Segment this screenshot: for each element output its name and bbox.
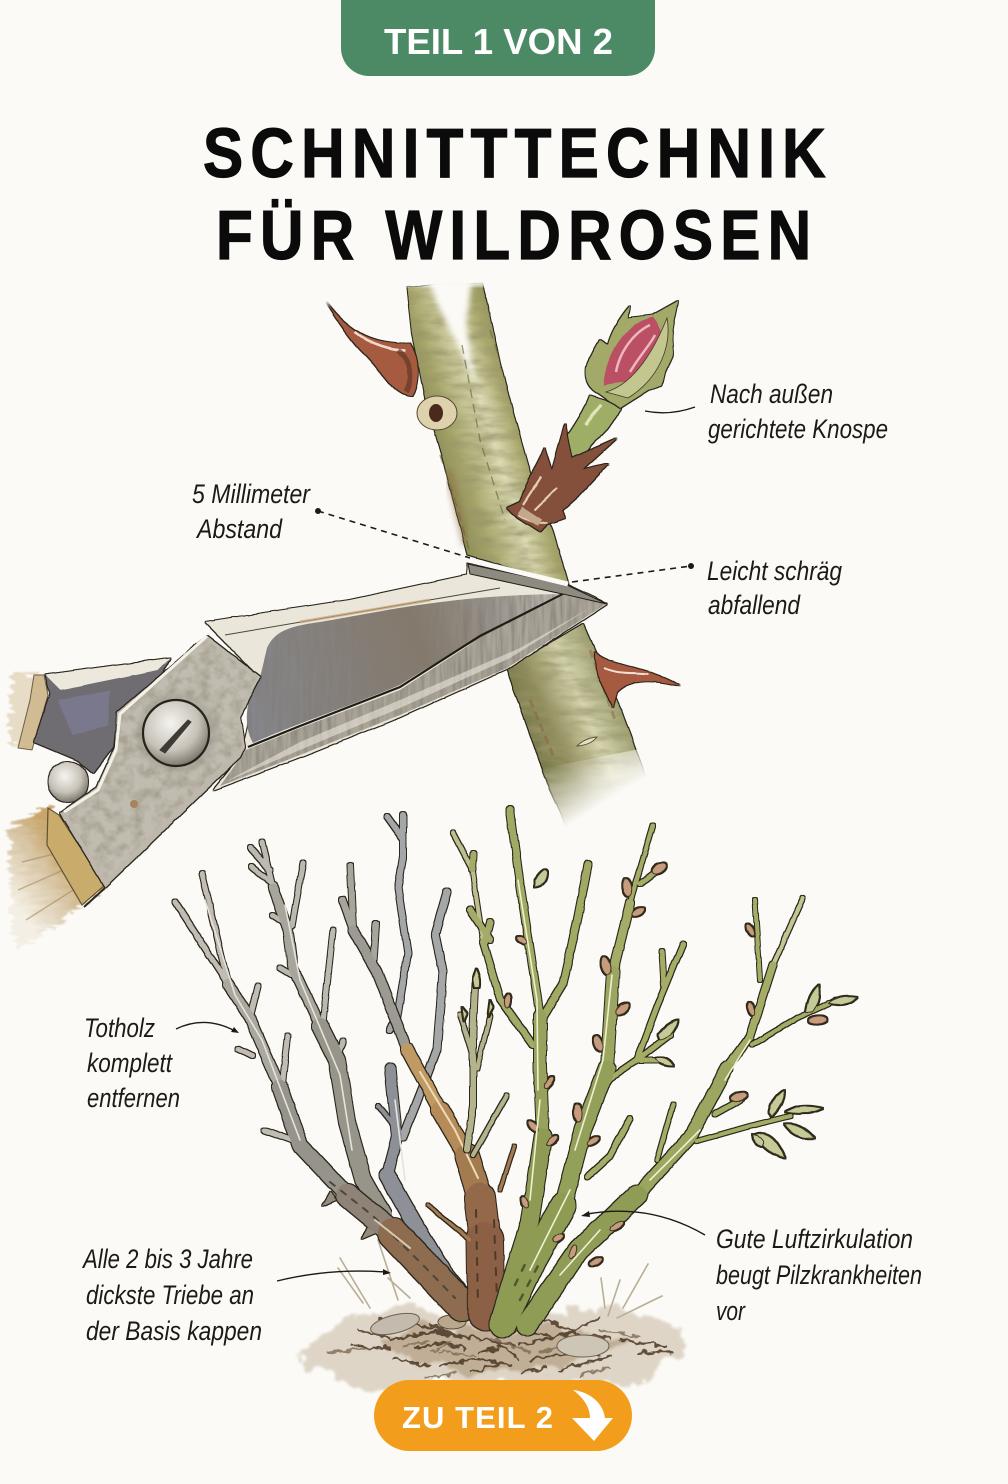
bluish dead branch [378, 815, 468, 1302]
annotation: Leicht schräg abfallend: abfallend [708, 590, 801, 620]
title [203, 114, 826, 274]
upper handle fibres [10, 672, 48, 750]
annotation: 5 Millimeter Abstand: 5 Millimeter [192, 479, 311, 509]
illustration: green healthy branches [453, 810, 857, 1325]
annotation: Nach außen gerichtete Knospe: gerichtete Knospe [708, 414, 888, 444]
branch G [453, 833, 483, 942]
branch gray left with brown base [175, 873, 462, 1306]
branch I [773, 898, 803, 965]
annotation: Gute Luftzirkulation: beugt Pilzkrankheiten [716, 1260, 922, 1290]
annotation: Leicht schräg abfallend: Leicht schräg [707, 556, 842, 586]
blade [205, 560, 607, 790]
annotation: Gute Luftzirkulation: vor [716, 1296, 746, 1326]
bud scale cluster [507, 424, 617, 532]
illustration: dead wood branches [175, 815, 514, 1312]
illustration: rose stem with bud and thorns [8, 272, 685, 950]
annotation: 5 Millimeter Abstand [192, 479, 470, 558]
highlights dead wood [205, 900, 455, 1298]
thorn: upper left [326, 302, 418, 396]
rose bud [586, 301, 678, 408]
branch with tan trunk [342, 866, 514, 1312]
annotation: 5 Millimeter Abstand: Abstand [195, 514, 283, 544]
annotation: Alle 2 bis 3 Jahre [81, 1244, 391, 1346]
leaf scar eye [417, 396, 457, 430]
illustration: pale young branches [460, 984, 507, 1155]
annotation: Totholz komplett entfernen: entfernen [87, 1083, 180, 1113]
annotation: Nach außen gerichtete Knospe: Nach außen [710, 379, 833, 409]
branch H [630, 825, 653, 903]
leaves [462, 870, 857, 1158]
annotation: Totholz komplett entfernen: komplett [87, 1048, 173, 1078]
upper stem [398, 272, 568, 584]
button: Zu Teil 2 [374, 1380, 632, 1451]
title: FÜR WILDROSEN [216, 196, 811, 274]
bud stalk [565, 396, 622, 478]
button: Zu Teil 2: ZU TEIL 2 [402, 1400, 553, 1435]
annotation: Alle 2 bis 3 Jahre: Alle 2 bis 3 Jahre [81, 1244, 253, 1274]
buds [504, 861, 827, 1268]
lower stem [507, 624, 685, 860]
lower handle [8, 805, 105, 950]
icon: curved arrow [572, 1390, 613, 1441]
green highlights [515, 880, 750, 1300]
annotation: Nach außen gerichtete Knospe [645, 379, 888, 444]
annotation: Gute Luftzirkulation [581, 1211, 922, 1326]
secateurs [8, 560, 607, 950]
thorn: lower right [594, 652, 680, 707]
annotation: Leicht schräg abfallend [572, 556, 842, 620]
pivot plate [60, 636, 260, 887]
illustration: soil [300, 1240, 690, 1385]
annotation: Alle 2 bis 3 Jahre: der Basis kappen [86, 1316, 262, 1346]
annotation: Gute Luftzirkulation: Gute Luftzirkulation [716, 1224, 913, 1254]
upper handle metal [34, 658, 170, 773]
pivot ball [48, 762, 88, 802]
annotation: Totholz komplett entfernen [84, 1013, 239, 1113]
annotation: Alle 2 bis 3 Jahre: dickste Triebe an [86, 1280, 254, 1310]
badge: Teil 1 von 2 [341, 0, 655, 76]
trunk highlights [420, 1072, 497, 1305]
title: SCHNITTTECHNIK [203, 114, 826, 192]
badge: Teil 1 von 2: TEIL 1 VON 2 [384, 21, 613, 62]
branch gray centre [250, 842, 385, 1218]
annotation: Totholz komplett entfernen: Totholz [84, 1013, 155, 1043]
pivot screw [137, 693, 217, 773]
